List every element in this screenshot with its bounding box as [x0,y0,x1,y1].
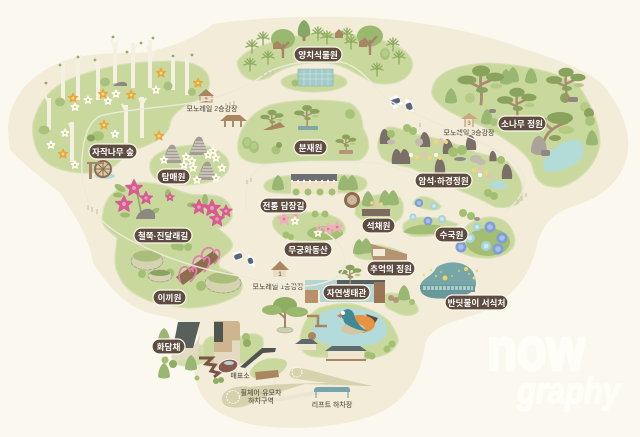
left wood wall [305,290,318,303]
azalea leaves and stems [113,182,208,218]
panel: rose of sharon hill [273,210,345,242]
label: hydrangea: 수국원 [440,229,463,240]
icon: monorail station 1 [271,261,289,278]
stone pagodas [162,137,217,180]
drop off label: 휠체어·유모차 [241,388,282,397]
label: rock garden [415,173,472,188]
conifers [272,175,358,190]
label: plum garden: 탐매원 [162,171,185,182]
water wheel hub [347,195,357,205]
icon: monorail station 3 [461,113,478,127]
pond water [313,308,387,347]
panel: hwadamchae buildings [158,321,287,384]
shrubs [364,340,396,360]
rock [113,82,127,86]
water wheel [344,192,360,208]
broad trees [271,20,383,58]
azalea flowers [116,180,232,225]
flower beds [409,138,492,178]
green area: hydrangea middle [403,217,458,236]
label: memory garden: 추억의 정원 [370,263,412,274]
birch leaf sprigs [45,36,193,84]
panel: east ecology garden [384,285,418,315]
green area: greenhouse [281,72,347,92]
watermark: graphy [516,370,622,411]
ferns [244,27,405,76]
panel: traditional wall [264,174,367,196]
shrubs [158,328,251,384]
icon: monorail station 2: 2 [204,98,208,104]
pine trees [458,66,586,120]
label: fern garden [294,47,342,62]
pale rocks [387,138,486,165]
green area: memory garden [354,245,405,261]
curved pine [543,112,574,145]
label: memory garden [367,261,415,276]
icon: monorail trains lower [232,251,255,267]
label: fern garden: 양치식물원 [298,49,338,60]
water area [420,262,476,299]
small rocks [489,97,578,156]
ticket shelter [240,348,276,368]
conifers and shrubs [445,67,598,146]
brick path [199,358,219,377]
bridge [307,316,327,326]
green area: rose of sharon [273,212,345,242]
label: stone colour garden: 석채원 [367,220,390,231]
rocks [531,136,547,155]
rock [136,209,155,219]
label: rose of sharon [284,242,332,257]
dark roof [337,280,385,284]
band [222,382,372,408]
light flowers [410,202,491,251]
pond [543,140,584,172]
label: rock garden: 암석·하경정원 [418,175,469,186]
hanok wall [291,174,338,196]
icon: monorail station 3: 3 [467,121,471,127]
blue flowers [415,199,508,254]
label: birch forest: 자작나무 숲 [92,146,134,157]
green area: traditional wall [264,175,367,194]
panel: pond and mandarin duck [295,304,399,360]
pavilions [295,332,367,360]
flower bed [362,209,390,216]
building 2 wall [214,341,240,365]
lift label: 리프트 하차장 [312,400,353,409]
green area: stone colour garden [355,194,403,223]
label: moss garden [153,290,186,305]
label: firefly: 반딧불이 서식처 [448,297,505,308]
panel: stone colour garden [344,190,403,223]
label: firefly [445,295,508,310]
icon: monorail station 1: 1 [278,272,282,278]
panel: greenhouse [281,69,347,92]
panel: fern garden [237,20,413,84]
building 2 [214,321,240,360]
green area: azalea and moss [102,182,242,308]
green area: east garden [384,293,418,315]
green area centre [203,334,263,367]
label: pine garden: 소나무 정원 [501,118,543,129]
shrubs [242,109,355,154]
label: moss garden: 이끼원 [158,292,181,303]
house window [373,249,385,256]
building wall 1 [173,335,200,362]
drop off label second line: 하차구역 [248,396,274,405]
panel: rock garden [378,124,522,208]
flowers [278,212,343,236]
label: bonsai garden: 분재원 [299,142,322,153]
brown pod building [217,357,239,375]
label: stone colour garden [362,218,395,233]
green area: bonsai garden [238,100,369,164]
green area: birch forest [33,61,209,173]
shrubs [282,210,343,240]
panel: nature ecology hall [305,265,385,303]
pod glass [224,361,234,365]
building glass [305,280,378,302]
jars and tree [388,285,415,305]
station label 2: 모노레일 2승강장 [187,104,238,113]
birch shrubs [38,78,196,142]
small pond [489,181,507,189]
shrub [292,80,298,86]
bridge rail [423,286,473,290]
building roof 1 [173,322,200,348]
walking and monorail paths [82,61,526,286]
panel: plum garden [150,137,229,185]
label: traditional wall [260,198,307,213]
building 2 roof [214,322,223,342]
pine above hall [338,265,362,284]
right wood wall [374,282,385,303]
shrubs [138,242,206,291]
house [368,243,407,260]
bridge [420,285,475,298]
white blossoms [160,147,226,183]
big pine tree [262,297,308,333]
watermark [487,316,622,411]
label: azalea [134,228,192,243]
lawn [250,358,287,379]
label: ecology hall [323,285,370,300]
dark hedges [403,224,510,256]
flowers [370,201,383,207]
label: birch forest [89,144,137,159]
panel: memory garden [353,238,407,261]
birch trunks [45,38,187,162]
panel: pine garden [432,63,600,187]
green area: pine garden [432,63,600,187]
icon: monorail trains top [388,95,414,112]
green area: pond bank [300,304,399,360]
panel: drop off zones [222,367,372,408]
mandarin duck [337,309,378,334]
wedge [289,368,372,386]
label: traditional wall: 전통 담장길 [263,200,305,211]
bonsai trees [260,105,356,154]
panel: birch forest [33,36,209,173]
label: hydrangea [435,227,468,242]
icon: water wheel [87,160,115,179]
wood deck [255,370,279,380]
moss stone circles [131,250,241,293]
white dashed circles [226,367,302,404]
label: ecology hall: 자연생태관 [327,287,366,298]
label: hwadamchae [152,339,185,354]
green area: hydrangea small [413,197,441,210]
label: pine garden [498,116,546,131]
station label 1: 모노레일 1승강장 [253,282,304,291]
conifers [362,190,399,206]
green area: hydrangea large [457,217,515,258]
orange flowers [58,68,203,158]
green area: fern garden [237,33,413,84]
label: azalea: 철쭉·진달래길 [138,230,188,241]
label: plum garden [157,169,190,184]
panel: firefly habitat [420,262,478,299]
fireflies [423,267,478,280]
bird houses [273,29,367,49]
panel: azalea and moss garden [102,180,242,308]
watermark: now [487,316,585,383]
white flowers [47,86,160,168]
greenhouse building [298,69,333,86]
icon: lift station [314,387,350,398]
rocks [380,129,512,179]
green area: plum garden [150,145,229,185]
icon: monorail station 2 [198,89,214,104]
faint lane [262,393,320,400]
ticket office label: 매표소 [230,371,250,380]
heart bridge [176,248,220,285]
panel: bonsai garden [238,100,369,164]
panel: hydrangea garden [403,197,515,258]
green area west [172,345,204,366]
conifers [353,238,372,254]
green area: rock garden [378,127,522,208]
shrubs [459,209,480,221]
icon: pavilion [220,115,247,127]
label: bonsai garden [294,140,327,155]
label: hwadamchae: 화담채 [157,341,180,352]
station label 3: 모노레일 3승강장 [444,128,495,137]
label: rose of sharon: 무궁화동산 [288,244,328,255]
shrubs [387,124,505,200]
